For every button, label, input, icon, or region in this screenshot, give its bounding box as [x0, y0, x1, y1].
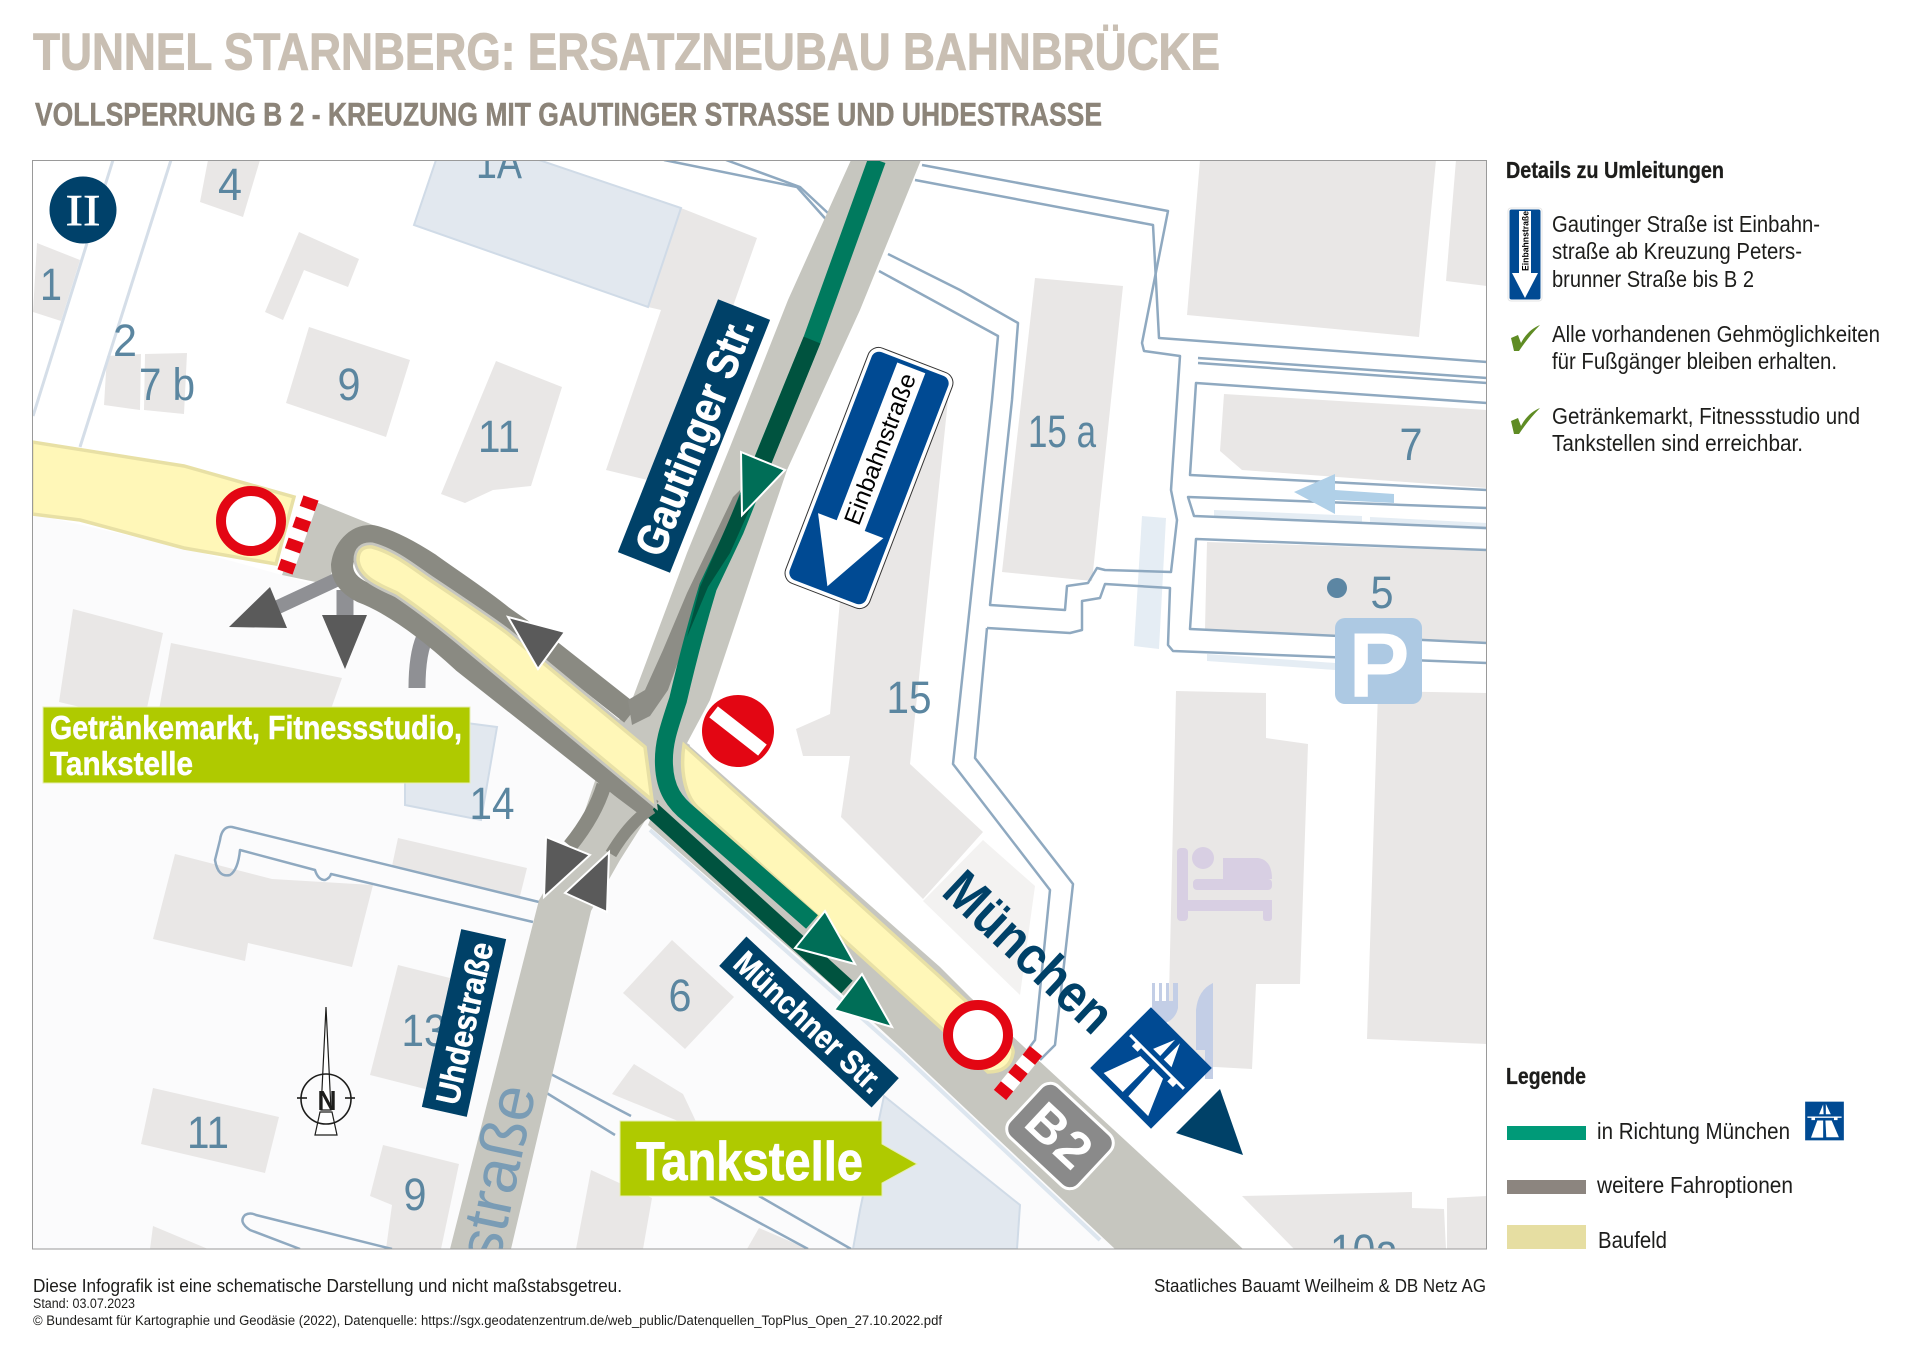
legend swatch: yellow [1507, 1225, 1586, 1249]
house numbers: 11 [478, 411, 520, 462]
house numbers: 5 [1370, 567, 1394, 618]
icon: small one-way sign [1508, 208, 1542, 301]
icon: check mark [1511, 325, 1540, 351]
panel: details [1506, 157, 1880, 456]
side road stubs [278, 580, 427, 688]
arrow: direction München [1176, 1089, 1243, 1155]
badge: phase II [50, 176, 116, 244]
icon: motorway sign [1090, 1007, 1212, 1129]
further driving options: grey route [342, 536, 652, 854]
road: Uhdestraße [450, 778, 655, 1249]
icon: parking [1335, 618, 1422, 704]
legend swatch: grey [1507, 1180, 1586, 1194]
house numbers: 2 [113, 315, 137, 366]
footer date: Stand: 03.07.2023 [33, 1296, 135, 1311]
house numbers: 1 [40, 259, 62, 310]
map frame [32, 160, 1486, 1249]
legend text: Baufeld: Baufeld [1598, 1227, 1667, 1253]
road sign: B2: B2 [1014, 1091, 1105, 1182]
icon: parking: P [1348, 615, 1410, 717]
icon: light blue direction arrow [1294, 474, 1394, 514]
label: Gautinger Str.: Gautinger Str. [626, 310, 764, 563]
one-way sign [782, 344, 956, 612]
legend text: in Richtung München: in Richtung München [1597, 1118, 1790, 1144]
label: München: München [932, 859, 1126, 1045]
blue-tinted buildings [405, 160, 1020, 1249]
construction area: east yellow [683, 745, 1013, 1072]
heading: Details zu Umleitungen: Details zu Umleitungen [1506, 157, 1724, 183]
house numbers: 7 b [139, 359, 195, 410]
buildings [33, 160, 1487, 1249]
arrows: green [741, 452, 892, 1027]
barrier east [1000, 1051, 1036, 1095]
one-way sign: Einbahnstraße [839, 370, 922, 529]
icon: small motorway sign [1805, 1102, 1844, 1140]
construction area: west yellow [32, 442, 294, 564]
text: accessibility: Getränkemarkt, Fitnessstudio und [1552, 403, 1860, 429]
road: Gautinger Straße [633, 161, 920, 743]
route to München: dark green lane [652, 810, 847, 987]
road sign: B2 [1002, 1078, 1118, 1194]
house numbers: 11 [187, 1107, 229, 1158]
text: pedestrian access [1552, 321, 1880, 374]
footer credit: Staatliches Bauamt Weilheim & DB Netz AG [1154, 1276, 1486, 1296]
road: west arm segment [282, 500, 373, 585]
road: central junction [619, 717, 690, 809]
text: one-way detail: straße ab Kreuzung Peters- [1552, 238, 1802, 264]
icon: check mark [1511, 408, 1540, 434]
house numbers: 15 a [1028, 406, 1097, 457]
text: accessibility [1552, 403, 1860, 456]
house numbers: 10a [1330, 1225, 1399, 1276]
text: one-way detail: brunner Straße bis B 2 [1552, 266, 1754, 292]
footpaths [33, 160, 1487, 1249]
legend text: weitere Fahroptionen: weitere Fahroptionen [1596, 1172, 1793, 1198]
icon: restaurant [1152, 983, 1213, 1079]
grey route along Gautinger Straße [628, 490, 740, 725]
arrows: grey [229, 587, 609, 912]
text: accessibility: Tankstellen sind erreichbar. [1552, 430, 1803, 456]
house numbers: 9 [404, 1169, 426, 1220]
road: main B2 east arm [648, 740, 1243, 1249]
label: Münchner Str.: Münchner Str. [727, 944, 891, 1100]
road closure sign east [948, 1005, 1008, 1065]
barrier west [285, 498, 311, 572]
house numbers: 4 [218, 159, 242, 210]
title: TUNNEL STARNBERG: ERSATZNEUBAU BAHNBRÜCKE [33, 24, 1220, 82]
badge: phase II: II [66, 186, 100, 235]
house numbers: 1A [476, 137, 522, 188]
label: Getränkemarkt, Fitnessstudio, Tankstelle [43, 707, 470, 783]
route to München: dark green section [755, 340, 812, 480]
house numbers: 15 [886, 672, 932, 723]
legend swatch: green [1507, 1126, 1586, 1140]
label: Uhdestraße: Uhdestraße [429, 939, 500, 1108]
label: Getränkemarkt, Fitnessstudio, Tankstelle: Getränkemarkt, Fitnessstudio, [50, 709, 462, 746]
text: pedestrian access: Alle vorhandenen Gehmöglichkeiten [1552, 321, 1880, 347]
label: Getränkemarkt, Fitnessstudio, Tankstelle: Tankstelle [50, 745, 193, 782]
house numbers: 7 [1400, 419, 1422, 470]
house numbers: 9 [338, 359, 360, 410]
dot at number 5 [1327, 578, 1347, 598]
panel: legend [1506, 1063, 1844, 1253]
road closure sign west [221, 491, 281, 551]
text: pedestrian access: für Fußgänger bleiben erhalten. [1552, 348, 1837, 374]
label: Tankstelle: Tankstelle [636, 1130, 863, 1192]
icon: hotel bed [1177, 847, 1272, 921]
icon: small one-way sign: Einbahnstraße [1520, 211, 1530, 271]
icon: compass [297, 1007, 355, 1135]
no entry sign [702, 695, 774, 767]
road shoulder shadow [650, 830, 1100, 1240]
text: one-way detail [1552, 211, 1820, 292]
icon: compass: N [318, 1085, 336, 1116]
house numbers: 14 [470, 778, 514, 829]
map label: straße: straße [444, 1078, 550, 1268]
tapered dark strip [687, 495, 756, 637]
house numbers [40, 137, 1422, 1276]
construction area: island [358, 547, 652, 800]
subtitle: VOLLSPERRUNG B 2 - KREUZUNG MIT GAUTINGER STRASSE UND UHDESTRASSE [35, 96, 1102, 132]
heading: Legende: Legende [1506, 1063, 1586, 1089]
panel: map [32, 137, 1487, 1276]
road centre wedge at Uhdestraße [610, 792, 614, 796]
house numbers: 13 [402, 1005, 446, 1056]
route to München: green lane [664, 160, 877, 922]
house numbers: 6 [668, 970, 692, 1021]
footer note: Diese Infografik ist eine schematische Darstellung und nicht maßstabsgetreu. [33, 1276, 622, 1296]
pale patches [1134, 510, 1487, 670]
footer source: © Bundesamt für Kartographie und Geodäsie (2022), Datenquelle: https://sgx.geodatenzentrum.de/web_public/Datenquellen_TopPlus_Open_27.10.2022.pdf [33, 1313, 942, 1328]
text: one-way detail: Gautinger Straße ist Einbahn- [1552, 211, 1820, 237]
